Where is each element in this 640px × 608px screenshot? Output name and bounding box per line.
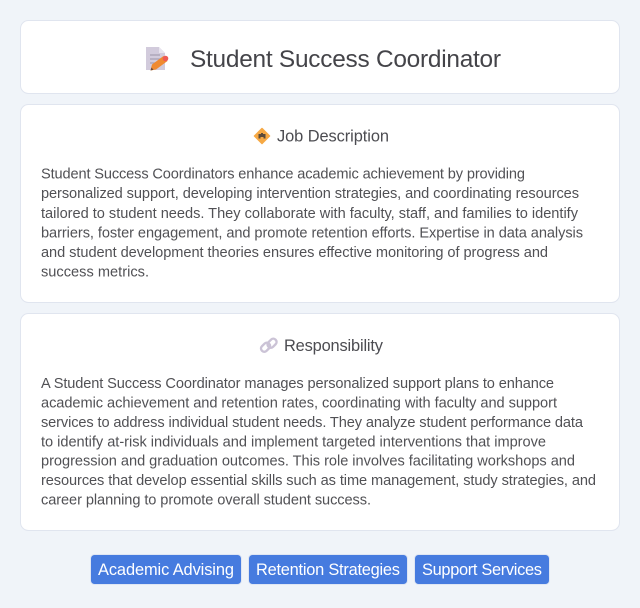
responsibility text: services to address individual student needs. They analyze student performance data [41,415,584,431]
responsibility text: career planning to promote overall student success. [41,492,371,508]
job description text: personalized support, developing intervention strategies, and coordinating resources [41,186,579,202]
job description text [41,167,583,281]
panel: job description [20,104,620,302]
panel: responsibility [20,314,620,530]
responsibility text: academic achievement and retention rates, coordinating with faculty and support [41,395,557,411]
title text: Student Success Coordinator [190,46,501,73]
responsibility text: progression and graduation outcomes. This role involves facilitating workshops and [41,454,575,470]
responsibility text: resources that develop essential skills such as time management, study strategies, and [41,473,596,489]
job description text: Student Success Coordinators enhance academic achievement by providing [41,167,525,183]
responsibility text [41,376,596,508]
tag: retention strategies: Retention Strategies [256,561,400,579]
tag: retention strategies [248,554,408,584]
heading: job description: Job Description [277,128,389,146]
panel: title [20,20,620,94]
job description text: barriers, foster engagement, and promote retention efforts. Expertise in data analysis [41,225,583,241]
icon: link [260,337,278,353]
tag: academic advising: Academic Advising [98,561,234,579]
job description text: success metrics. [41,265,149,281]
tag: support services [414,554,550,584]
tag: academic advising [90,554,242,584]
responsibility text: to identify at-risk individuals and implement targeted interventions that improve [41,434,546,450]
heading: responsibility: Responsibility [284,337,384,355]
tag: support services: Support Services [422,561,542,579]
job description text: tailored to student needs. They collaborate with faculty, staff, and families to identify [41,206,579,222]
icon: orange diamond [254,128,270,144]
responsibility text: A Student Success Coordinator manages personalized support plans to enhance [41,376,554,392]
icon: document with pencil [146,47,168,70]
job description text: and student development theories ensures effective monitoring of progress and [41,245,548,261]
